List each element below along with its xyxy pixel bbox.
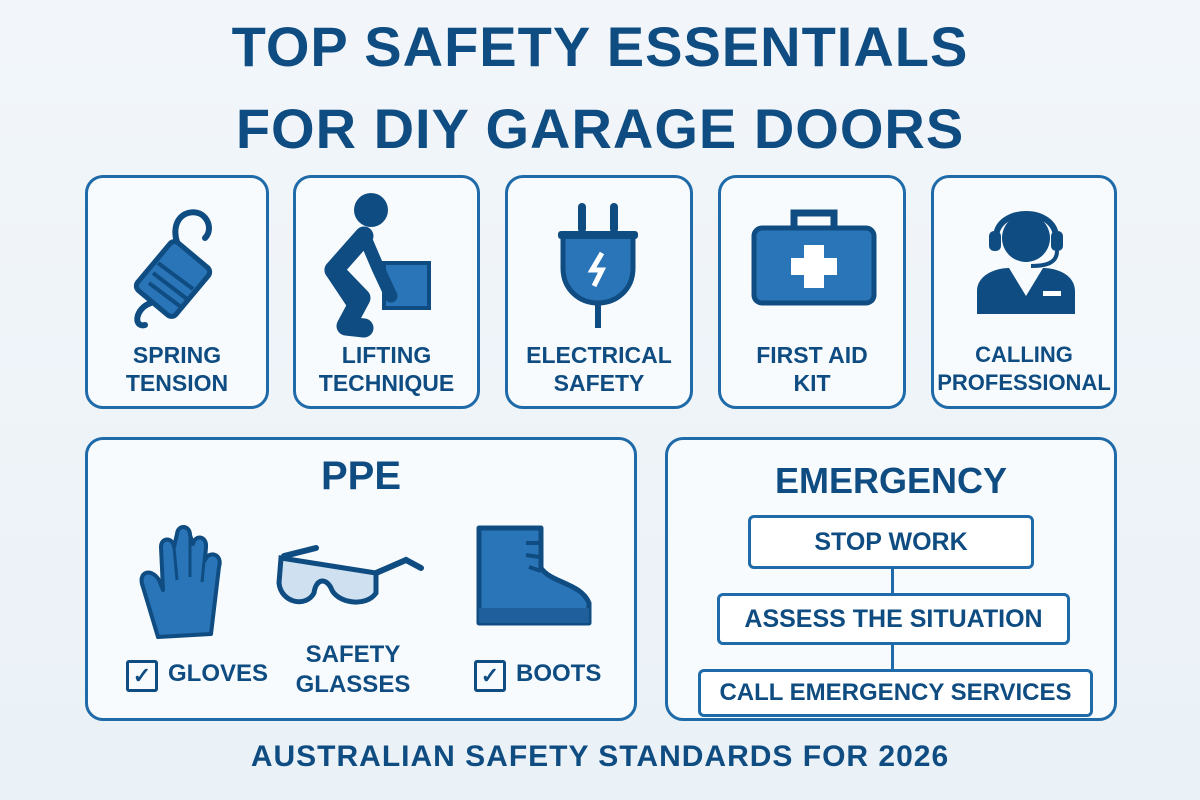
item: gloves: GLOVES <box>168 660 268 687</box>
icon: headset person <box>977 211 1075 314</box>
connector line <box>891 568 894 674</box>
step: call emergency: CALL EMERGENCY SERVICES <box>719 679 1072 706</box>
card: first aid kit: FIRST AID <box>756 342 868 368</box>
card: lifting technique: LIFTING <box>342 342 431 368</box>
title: TOP SAFETY ESSENTIALS <box>232 15 968 78</box>
icon: spring <box>134 209 212 328</box>
footer: AUSTRALIAN SAFETY STANDARDS FOR 2026 <box>251 740 949 773</box>
step: assess: ASSESS THE SITUATION <box>744 605 1043 633</box>
icon: boot <box>476 526 592 626</box>
card: lifting technique <box>293 175 480 409</box>
item: gloves: ✓ <box>133 663 151 688</box>
item: safety glasses: SAFETY <box>306 641 400 668</box>
step: call emergency <box>698 669 1093 717</box>
item: safety glasses <box>296 641 410 698</box>
title <box>232 15 968 160</box>
heading: PPE: PPE <box>321 454 401 498</box>
icon: safety glasses <box>276 545 424 605</box>
item: safety glasses: GLASSES <box>296 671 410 698</box>
step: assess <box>717 593 1070 645</box>
icon: glove <box>140 525 222 639</box>
card: first aid kit: KIT <box>793 370 831 396</box>
card: lifting technique: TECHNIQUE <box>319 370 454 396</box>
item: gloves <box>126 660 268 692</box>
heading: emergency: EMERGENCY <box>775 460 1007 501</box>
item: boots: ✓ <box>481 663 499 688</box>
item: boots: BOOTS <box>516 660 601 687</box>
card: spring tension: SPRING <box>133 342 221 368</box>
card: first aid kit <box>718 175 906 409</box>
card: electrical safety: SAFETY <box>554 370 644 396</box>
card: electrical safety: ELECTRICAL <box>526 342 672 368</box>
icon: lifting person <box>324 193 431 338</box>
card: calling professional: PROFESSIONAL <box>937 370 1111 395</box>
icon: first aid kit <box>752 210 876 306</box>
panel: emergency <box>665 437 1117 721</box>
card: calling professional <box>931 175 1117 409</box>
icon: plug <box>558 203 638 328</box>
title: FOR DIY GARAGE DOORS <box>236 97 964 160</box>
step: stop work: STOP WORK <box>814 528 968 556</box>
panel: PPE <box>85 437 637 721</box>
item: boots <box>474 660 601 692</box>
card: electrical safety <box>505 175 693 409</box>
step: stop work <box>748 515 1034 569</box>
card: spring tension <box>85 175 269 409</box>
card: spring tension: TENSION <box>126 370 228 396</box>
card: calling professional: CALLING <box>975 342 1073 367</box>
